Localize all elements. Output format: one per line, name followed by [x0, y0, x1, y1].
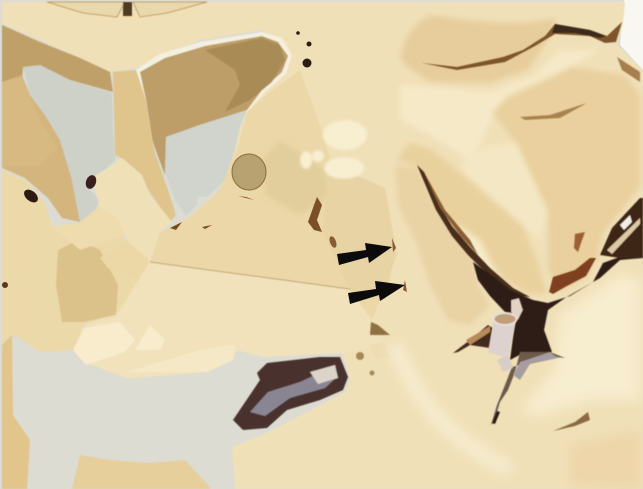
top right white corner — [620, 0, 643, 70]
round lesion — [232, 154, 266, 190]
arrow: lower — [348, 281, 405, 304]
pale patches — [300, 120, 367, 179]
vessels — [488, 298, 558, 380]
sulci — [417, 22, 640, 297]
pale white matter band — [400, 50, 600, 160]
septum and fornix — [52, 70, 176, 278]
left ventricle cavity — [2, 25, 115, 222]
central ventricle cavity — [135, 32, 292, 216]
gyrus one cortex — [400, 15, 557, 83]
white tracts — [395, 345, 510, 470]
lower left tissue sliver — [2, 335, 30, 489]
arrow: upper — [337, 243, 392, 265]
vessel: large tube — [488, 317, 516, 358]
bottom fragment — [72, 455, 210, 489]
vessel: lower tube — [497, 355, 513, 372]
gyrus two cortex — [493, 67, 640, 292]
lower right gyrus cortex — [520, 275, 640, 415]
insula cortex band — [397, 142, 547, 295]
insular white matter — [460, 143, 547, 240]
right cortex folds — [395, 15, 640, 489]
left lobe fragment — [2, 170, 150, 352]
vessel: grey branch — [513, 352, 558, 380]
dark fissure — [453, 198, 643, 431]
central ventricle mat opening — [165, 110, 247, 216]
vessel: small tube — [511, 298, 523, 320]
choroid plexus — [233, 357, 348, 430]
left ventricle mat opening — [23, 65, 115, 222]
tan basal piece — [56, 240, 118, 322]
small dark vessels — [2, 31, 407, 292]
pinkish lower tissue — [570, 430, 640, 489]
insula pale core — [453, 222, 505, 282]
pockets near basal cistern — [356, 322, 391, 376]
top lobes — [47, 2, 207, 17]
left sulcal cortex — [395, 165, 490, 325]
thalamus region — [73, 70, 397, 378]
